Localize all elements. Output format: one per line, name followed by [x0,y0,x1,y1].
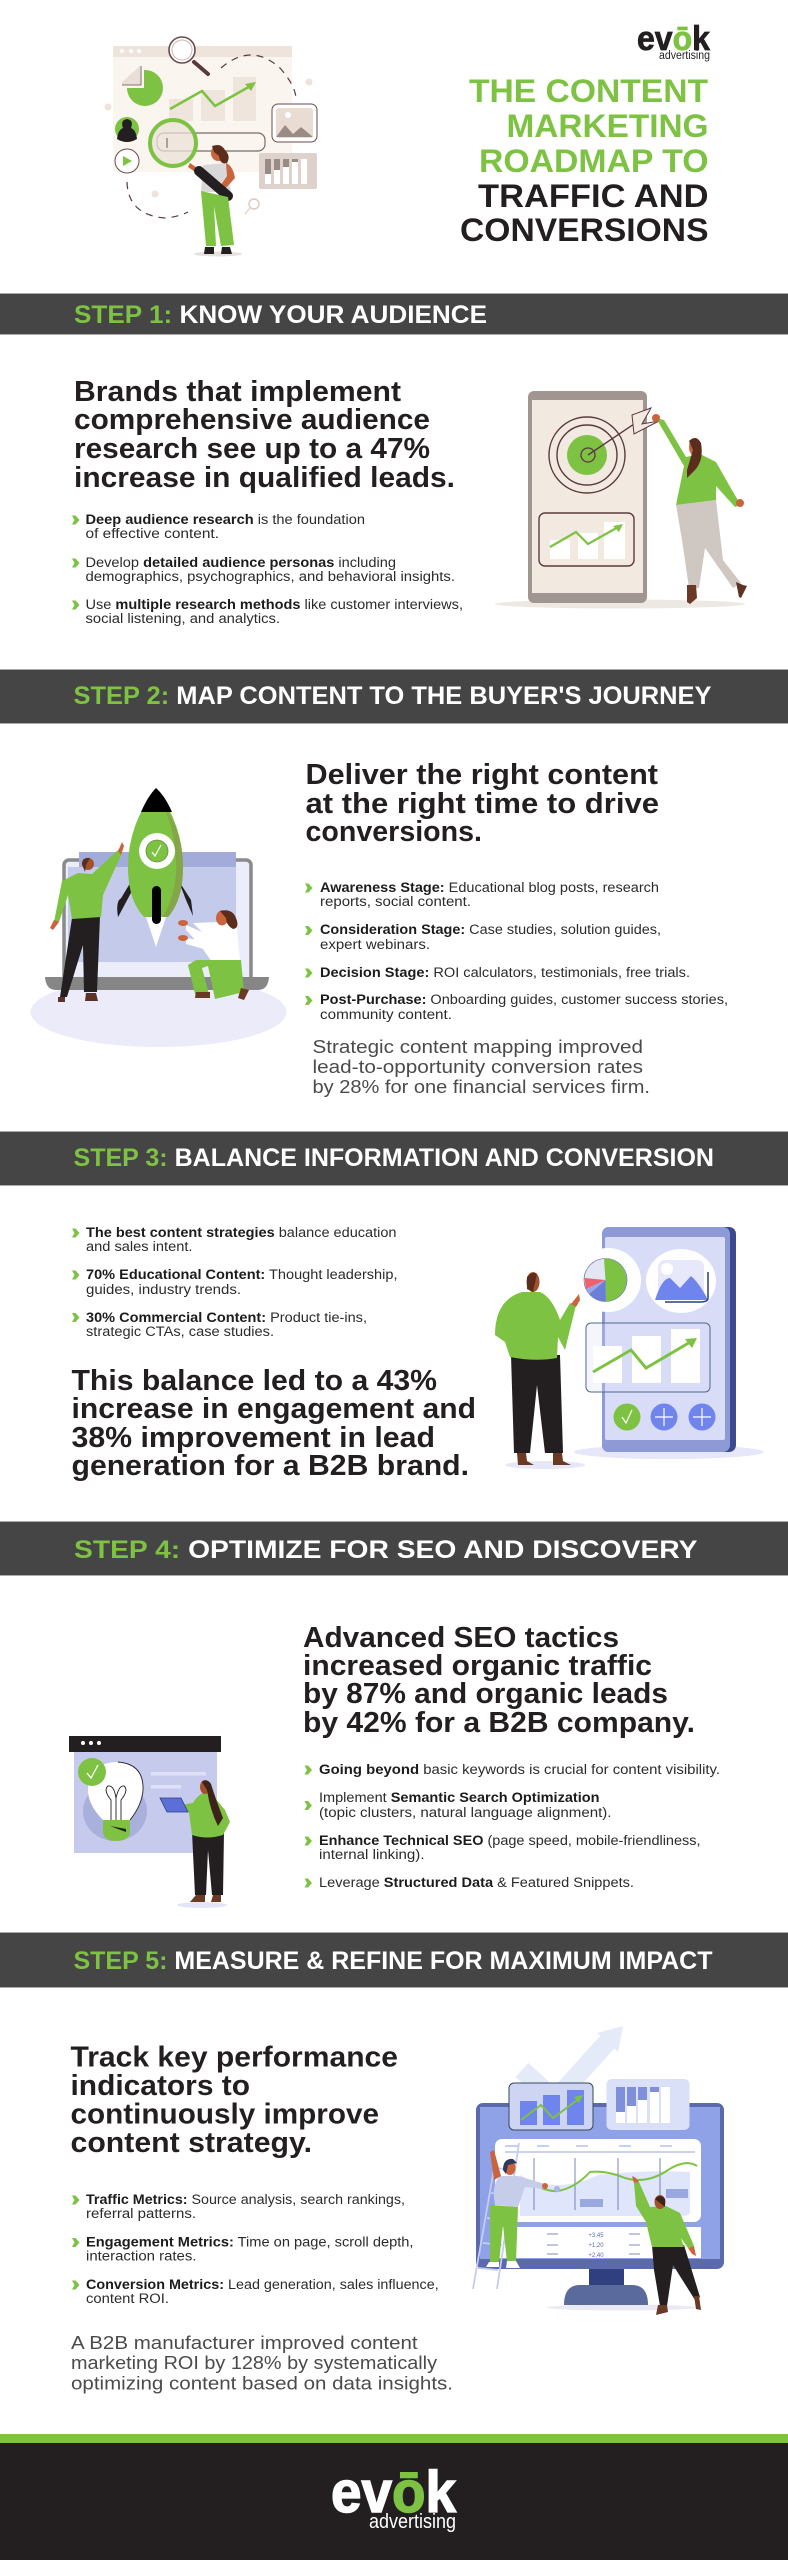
illustration: analytics monitor with two people [473,2026,724,2315]
logo: evok advertising top: advertising [659,50,710,62]
bullet: traffic metrics: Traffic Metrics: Source analysis, search rankings, [86,2192,405,2207]
bullet: 30% commercial content [72,1310,367,1339]
panel: step 5 measure [70,2026,724,2394]
logo: evok advertising top: evōk [637,20,710,58]
paragraph: b2b manufacturer result: optimizing content based on data insights. [71,2374,453,2394]
panel: step 2 map content [30,759,728,1097]
heading: step 1 statistic: Brands that implement [74,376,401,408]
illustration: man viewing charts on phone [495,1227,764,1469]
bullet: semantic search optimization [304,1790,612,1820]
bullet: 30% commercial content: strategic CTAs, case studies. [86,1324,274,1339]
heading: step 1 statistic: increase in qualified leads. [74,462,455,494]
step 3 banner: STEP 3: BALANCE INFORMATION AND CONVERSION [74,1144,714,1172]
bullet: post-purchase [305,992,728,1022]
illustration: woman at phone with target [495,391,747,608]
title: TRAFFIC AND [478,178,708,214]
heading: step 4 statistic: Advanced SEO tactics [303,1622,619,1654]
heading: step 2 statement [306,759,659,848]
heading: step 3 statistic: increase in engagement and [72,1393,476,1425]
heading: step 4 statistic [303,1622,695,1739]
bullet: technical seo: internal linking). [319,1847,424,1862]
illustration: analytics monitor with two people: +1,20 [588,2243,604,2249]
paragraph: content mapping result: by 28% for one financial services firm. [312,1077,650,1097]
bullet: semantic search optimization: (topic clusters, natural language alignment). [319,1805,612,1820]
step 1 banner: STEP 1: KNOW YOUR AUDIENCE [74,301,487,329]
bullet: traffic metrics: referral patterns. [86,2206,196,2221]
title: ROADMAP TO [479,143,708,179]
bullet: 70% educational content: guides, industry trends. [86,1282,241,1297]
paragraph: content mapping result: lead-to-opportunity conversion rates [312,1057,643,1077]
heading: step 4 statistic: by 87% and organic leads [303,1678,668,1710]
bullet: traffic metrics [72,2192,405,2221]
bullet: research methods [72,597,463,626]
heading: step 5 statement: indicators to [70,2070,250,2102]
bullet: technical seo [304,1833,700,1862]
bullet: 70% educational content: 70% Educational Content: Thought leadership, [86,1267,398,1282]
heading: step 2 statement: conversions. [306,816,482,848]
bullet: conversion metrics [72,2277,439,2306]
bullet: best content strategies [72,1225,396,1254]
bullet: audience personas: demographics, psychographics, and behavioral insights. [86,569,455,584]
bullet: awareness stage [305,880,659,909]
bullet: deep audience research [72,512,365,541]
paragraph: b2b manufacturer result [71,2333,453,2394]
heading: step 3 statistic: This balance led to a 43% [72,1365,437,1397]
paragraph: b2b manufacturer result: marketing ROI by 128% by systematically [71,2353,437,2373]
bullet: 30% commercial content: 30% Commercial Content: Product tie-ins, [86,1310,367,1325]
heading: step 5 statement: Track key performance [70,2042,398,2074]
illustration: analytics monitor with two people: +2,40 [588,2253,604,2259]
footer [0,2434,788,2560]
bullet: conversion metrics: content ROI. [86,2291,169,2306]
bullet: post-purchase: community content. [320,1007,452,1022]
step 4 banner: STEP 4: OPTIMIZE FOR SEO AND DISCOVERY [74,1536,698,1564]
paragraph: content mapping result [312,1037,650,1097]
step 1 banner [0,293,788,335]
heading: step 1 statistic: research see up to a 47% [74,433,430,465]
title [460,73,708,248]
bullet: audience personas [72,555,455,584]
heading: step 5 statement: content strategy. [70,2127,312,2159]
heading: step 1 statistic [74,376,455,494]
panel: step 1 know your audience [72,376,747,626]
step 3 banner [0,1131,788,1186]
bullet: deep audience research: Deep audience research is the foundation [86,512,365,527]
bullet: consideration stage: expert webinars. [320,937,430,952]
paragraph: b2b manufacturer result: A B2B manufacturer improved content [71,2333,418,2353]
bullet: deep audience research: of effective content. [86,526,219,541]
heading: step 5 statement: continuously improve [70,2098,379,2130]
step 5 banner: STEP 5: MEASURE & REFINE FOR MAXIMUM IMPACT [74,1947,712,1975]
heading: step 3 statistic: 38% improvement in lead [72,1422,435,1454]
bullet: research methods: social listening, and analytics. [86,611,280,626]
step 2 banner: STEP 2: MAP CONTENT TO THE BUYER'S JOURNEY [74,682,712,710]
title: CONVERSIONS [460,212,708,248]
paragraph: content mapping result: Strategic content mapping improved [312,1037,643,1057]
bullet: research methods: Use multiple research methods like customer interviews, [86,597,463,612]
bullet: post-purchase: Post-Purchase: Onboarding guides, customer success stories, [320,992,728,1007]
bullet: best content strategies: The best content strategies balance education [86,1225,396,1240]
bullet: going beyond keywords: Going beyond basic keywords is crucial for content visibility. [319,1762,720,1777]
bullet: engagement metrics: interaction rates. [86,2248,196,2264]
heading: step 4 statistic: increased organic traffic [303,1650,652,1682]
heading: step 2 statement: at the right time to drive [306,788,659,820]
step 2 banner [0,669,788,724]
panel: step 3 balance [72,1225,764,1482]
heading: step 5 statement [70,2042,398,2159]
heading: step 2 statement: Deliver the right content [306,759,658,791]
title: MARKETING [506,108,708,144]
bullet: audience personas: Develop detailed audience personas including [86,555,396,570]
bullet: semantic search optimization: Implement Semantic Search Optimization [319,1790,600,1805]
bullet: engagement metrics [72,2234,414,2264]
bullet: technical seo: Enhance Technical SEO (page speed, mobile-friendliness, [319,1833,700,1848]
illustration: analytics monitor with two people: +3,45 [588,2233,604,2239]
bullet: decision stage: Decision Stage: ROI calculators, testimonials, free trials. [320,965,690,980]
heading: step 3 statistic: generation for a B2B brand. [72,1450,469,1482]
bullet: awareness stage: reports, social content. [320,894,471,909]
logo: evok advertising footer: evōk [331,2460,457,2525]
step 5 banner [0,1932,788,1988]
illustration: rocket launching from laptop [30,788,286,1047]
bullet: engagement metrics: Engagement Metrics: Time on page, scroll depth, [86,2234,414,2250]
bullet: structured data: Leverage Structured Data & Featured Snippets. [319,1875,634,1890]
bullet: best content strategies: and sales intent. [86,1239,192,1254]
logo: evok advertising footer: advertising [369,2511,456,2533]
bullet: conversion metrics: Conversion Metrics: Lead generation, sales influence, [86,2277,439,2292]
bullet: consideration stage: Consideration Stage: Case studies, solution guides, [320,922,661,937]
bullet: consideration stage [305,922,661,952]
heading: step 3 statistic [72,1365,476,1482]
title: THE CONTENT [469,73,708,109]
heading: step 1 statistic: comprehensive audience [74,404,430,436]
illustration: lightbulb window and woman with laptop [69,1736,230,1908]
panel: step 4 seo [69,1622,720,1908]
bullet: 70% educational content [72,1267,398,1297]
heading: step 4 statistic: by 42% for a B2B company. [303,1707,695,1739]
bullet: awareness stage: Awareness Stage: Educational blog posts, research [320,880,659,895]
hero illustration: woman with magnifier and analytics dashboard [104,37,317,256]
step 4 banner [0,1521,788,1576]
